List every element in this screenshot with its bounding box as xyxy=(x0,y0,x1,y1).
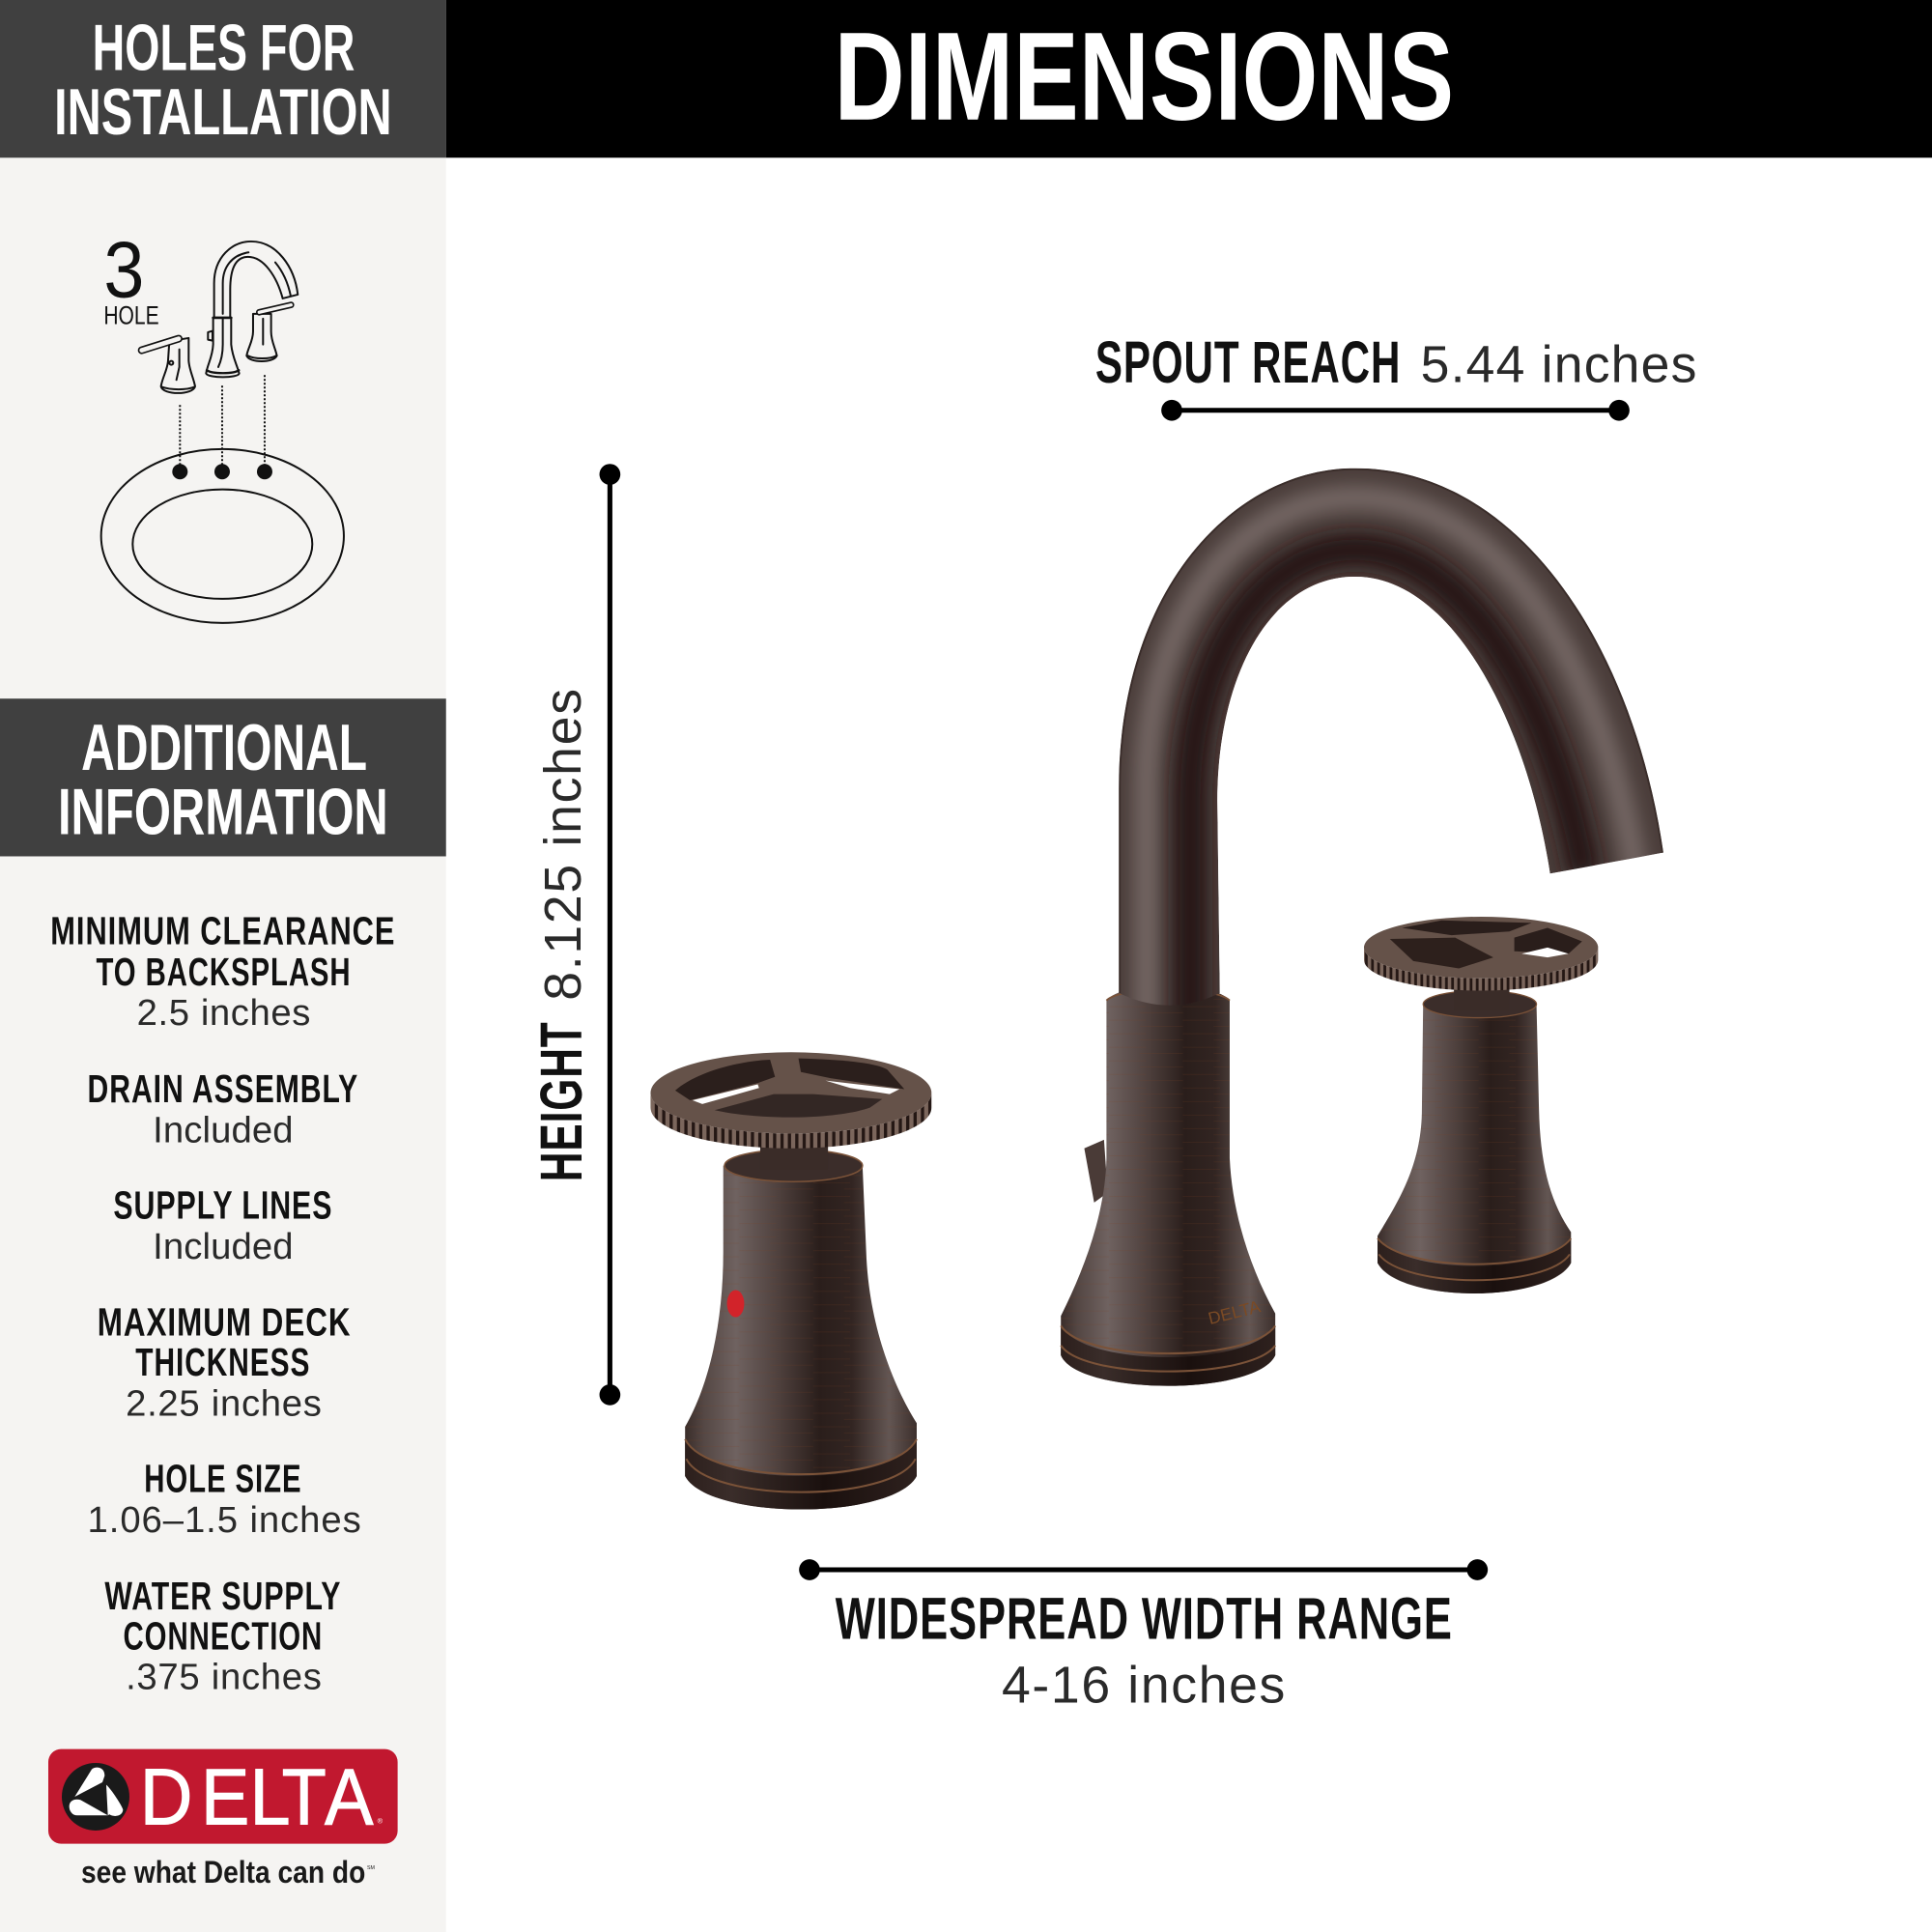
logo: delta: SM xyxy=(367,1865,375,1871)
dotted alignment lines xyxy=(180,375,265,466)
heading: additional information xyxy=(0,698,446,856)
dimension: spout reach xyxy=(1095,329,1696,421)
spec: maximum deck thickness: THICKNESS xyxy=(135,1340,310,1384)
spec: maximum deck thickness: MAXIMUM DECK xyxy=(98,1300,352,1345)
spec: drain assembly: DRAIN ASSEMBLY xyxy=(88,1066,358,1111)
heading: additional information: ADDITIONAL xyxy=(81,712,367,784)
dimension: height xyxy=(528,464,620,1406)
heading: holes for installation xyxy=(0,0,446,157)
icon: basin xyxy=(101,449,344,623)
dimension: widespread width range: 4-16 inches xyxy=(1002,1658,1285,1715)
logo: delta: ® xyxy=(378,1816,384,1825)
label: 3 hole xyxy=(103,226,159,330)
dimension: height: HEIGHT xyxy=(528,1021,594,1181)
red hot indicator xyxy=(727,1290,744,1318)
spout xyxy=(1119,469,1663,1035)
heading: dimensions xyxy=(446,0,1932,157)
dimension: spout reach: SPOUT REACH xyxy=(1095,329,1401,395)
spec: minimum clearance xyxy=(50,909,395,1034)
engraved logo: DELTA xyxy=(1207,1296,1263,1328)
dimension: widespread width range xyxy=(799,1559,1488,1715)
heading: additional information: INFORMATION xyxy=(58,777,388,849)
spec: water supply connection xyxy=(104,1574,341,1698)
spec: minimum clearance: 2.5 inches xyxy=(137,992,310,1034)
product: faucet xyxy=(650,469,1663,1510)
logo: delta: DELTA xyxy=(140,1751,374,1841)
centre body xyxy=(1061,985,1275,1386)
left handle xyxy=(650,1052,931,1509)
label: 3 hole: 3 xyxy=(103,226,144,315)
dimension: spout reach: 5.44 inches xyxy=(1421,336,1696,393)
label: 3 hole: HOLE xyxy=(103,301,159,330)
spec: drain assembly: Included xyxy=(153,1109,294,1151)
spec: supply lines: Included xyxy=(153,1226,294,1267)
spec: minimum clearance: TO BACKSPLASH xyxy=(96,950,352,994)
spec: hole size: HOLE SIZE xyxy=(144,1457,301,1501)
dimension: height: 8.125 inches xyxy=(535,689,592,1001)
spec: hole size: 1.06–1.5 inches xyxy=(88,1499,361,1541)
spec: supply lines xyxy=(113,1182,332,1267)
spec: maximum deck thickness: 2.25 inches xyxy=(126,1383,322,1425)
spec: water supply connection: CONNECTION xyxy=(124,1613,323,1658)
spec: maximum deck thickness xyxy=(98,1300,352,1425)
heading: holes for installation: INSTALLATION xyxy=(54,76,392,149)
heading: dimensions: DIMENSIONS xyxy=(835,6,1454,147)
logo: delta xyxy=(48,1749,398,1889)
spec: water supply connection: WATER SUPPLY xyxy=(104,1574,341,1618)
spec: minimum clearance: MINIMUM CLEARANCE xyxy=(50,909,395,953)
icon: small faucet xyxy=(142,242,298,393)
icon: 3 hole faucet and sink diagram xyxy=(101,226,344,623)
spec: water supply connection: .375 inches xyxy=(126,1657,322,1698)
heading: holes for installation: HOLES FOR xyxy=(93,13,355,85)
right handle xyxy=(1364,917,1598,1293)
dimension: widespread width range: WIDESPREAD WIDTH RANGE xyxy=(836,1585,1453,1651)
logo: delta: see what Delta can do xyxy=(81,1854,365,1889)
spec: drain assembly xyxy=(88,1066,358,1151)
panel: sidebar xyxy=(0,0,446,1932)
spec: supply lines: SUPPLY LINES xyxy=(113,1182,332,1227)
spec: hole size xyxy=(88,1457,361,1541)
